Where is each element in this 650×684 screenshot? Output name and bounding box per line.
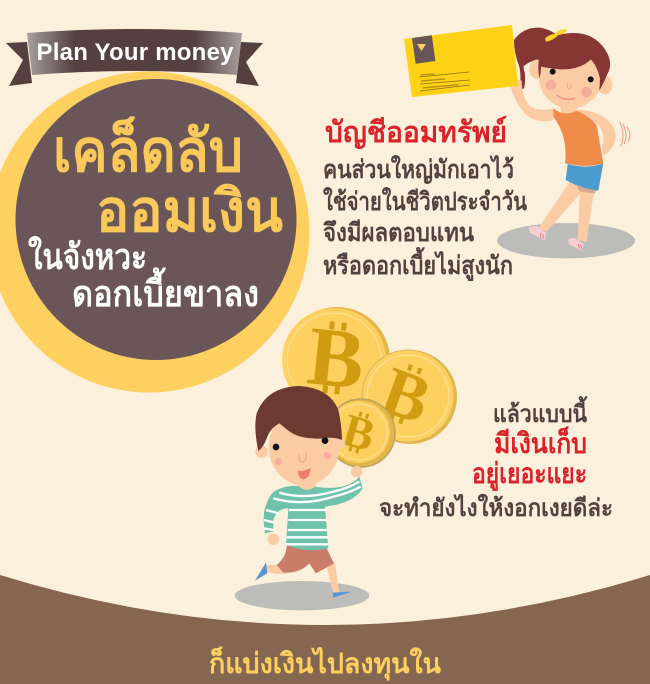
legs (578, 187, 594, 242)
ground shadow (497, 223, 635, 258)
hands (268, 466, 362, 545)
hair (538, 33, 610, 91)
shorts shadow and shorts (577, 187, 597, 193)
title line 1: เคล็ดลับ (53, 116, 243, 184)
subtitle line 2: ดอกเบี้ยขาลง (72, 267, 259, 314)
bottom brown section (0, 575, 650, 684)
right call-out text: จะทำยังไงให้งอกเงยดีล่ะ (379, 493, 613, 522)
ribbon banner (6, 29, 263, 86)
banner text: Plan Your money (36, 39, 234, 66)
title line 2: ออมเงิน (96, 179, 283, 244)
small coin: B (337, 404, 381, 461)
neck (297, 482, 316, 491)
striped shirt (263, 477, 363, 550)
ground shadow (235, 581, 369, 610)
head (529, 39, 612, 113)
right call-out text (379, 395, 613, 522)
legs (265, 565, 287, 574)
savings account body text: หรือดอกเบี้ยไม่สูงนัก (323, 246, 513, 282)
right call-out text: แล้วแบบนี้ (493, 395, 588, 428)
title badge circle (0, 72, 310, 392)
boy illustration (235, 386, 369, 610)
face details (273, 437, 331, 479)
shoes (255, 562, 267, 581)
large coin: B (303, 309, 369, 408)
face details (546, 69, 594, 99)
motion lines (619, 122, 630, 147)
shorts (277, 545, 334, 573)
girl illustration with savings book (497, 28, 635, 258)
savings account body text: ใช้จ่ายในชีวิตประจำวัน (323, 186, 527, 216)
raised arm (511, 80, 555, 121)
shoes (528, 226, 546, 241)
small coin (327, 399, 395, 467)
hair (255, 386, 342, 451)
hip arm (577, 109, 616, 156)
yellow savings book (404, 25, 518, 97)
savings account body text: คนส่วนใหญ่มักเอาไว้ (323, 154, 514, 184)
top (553, 108, 603, 166)
medium coin: B (372, 352, 441, 439)
right call-out text: อยู่เยอะแยะ (472, 458, 587, 491)
hair bow (545, 29, 567, 42)
neck (561, 100, 577, 115)
ponytail (514, 28, 557, 90)
right call-out text: มีเงินเก็บ (494, 426, 587, 459)
savings account body text (323, 154, 527, 282)
head (255, 409, 345, 485)
medium coin (362, 350, 457, 444)
bank logo block (412, 35, 435, 64)
large coin (282, 307, 390, 413)
closing line heading: ก็แบ่งเงินไปลงทุนใน (209, 646, 441, 681)
savings account body text: จึงมีผลตอบแทน (323, 219, 474, 247)
bitcoin coins (282, 307, 457, 467)
savings account heading: บัญชีออมทรัพย์ (325, 115, 507, 150)
subtitle line 1: ในจังหวะ (28, 235, 147, 277)
